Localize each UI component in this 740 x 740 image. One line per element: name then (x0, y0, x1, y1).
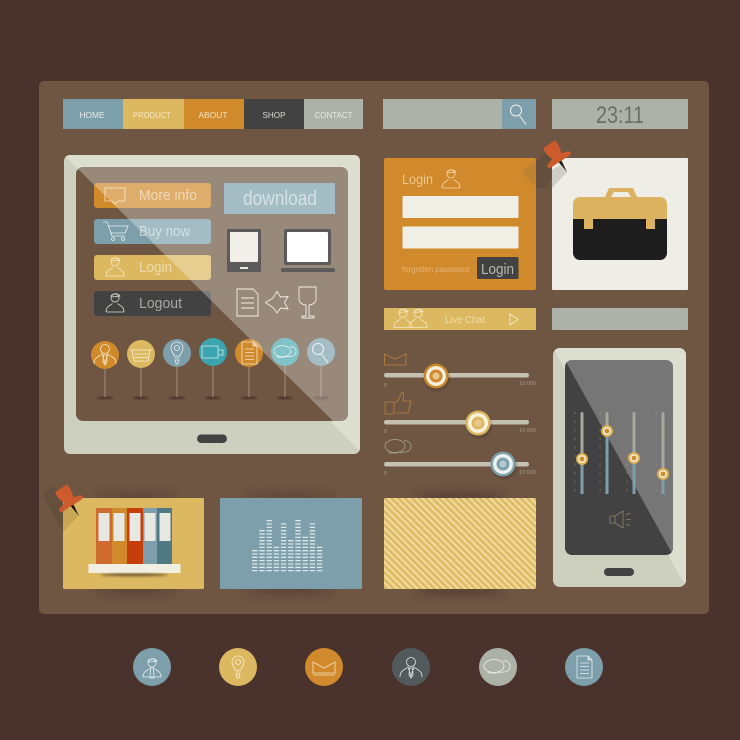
phone home button (604, 568, 634, 576)
icon: red push pin bottom (49, 481, 91, 524)
live chat bar (384, 308, 536, 330)
search bar (383, 99, 536, 129)
slider 2: 0 (384, 429, 387, 435)
panel: login card: Login (402, 171, 433, 187)
card shadows (96, 494, 505, 594)
icon: wine glass (299, 287, 316, 318)
slider 1: 10 000 (519, 381, 536, 387)
input: username (402, 196, 518, 218)
panel: equalizer card (220, 498, 362, 589)
slider 3 (384, 440, 536, 478)
slider 1: 0 (384, 383, 387, 389)
icon: laptop (281, 229, 335, 272)
clock (552, 99, 688, 129)
glass reflection (565, 360, 673, 555)
navigation bar: CONTACT (314, 110, 352, 120)
panel: login card: forgotten password (402, 264, 469, 274)
button: login (94, 255, 211, 280)
button: logout (94, 291, 211, 316)
icon: tablet device (227, 229, 261, 272)
icon: star (266, 292, 288, 313)
navigation bar: PRODUCT (133, 110, 171, 120)
slider 3: 0 (384, 471, 387, 477)
button: login submit: Login (481, 262, 514, 278)
shelf (88, 564, 180, 573)
shadow: pin on panel bottom (43, 485, 63, 532)
slider 1 (384, 354, 536, 390)
glass reflection (76, 167, 348, 436)
shadow: pin on panel top (533, 150, 560, 188)
binders (96, 508, 172, 564)
button: more info (94, 183, 211, 208)
button: buy now (94, 219, 211, 244)
icon: red push pin top (537, 137, 579, 180)
button: login: Login (139, 260, 172, 276)
tablet home button (197, 434, 227, 443)
button: download (224, 183, 335, 214)
icon: document (237, 289, 258, 316)
icon: envelope (305, 648, 343, 686)
button: logout: Logout (139, 296, 182, 312)
icon: user (442, 170, 460, 188)
panel: striped card (384, 498, 536, 589)
pin markers (91, 338, 335, 399)
clock: 23:11 (596, 102, 644, 129)
panel: login card (384, 158, 536, 290)
icon: document (565, 648, 603, 686)
button: more info: More info (139, 188, 197, 204)
navigation bar: HOME (80, 110, 105, 120)
gray bar (552, 308, 688, 330)
panel: main board (39, 81, 709, 614)
icon: businessman (392, 648, 430, 686)
navigation bar (63, 99, 363, 129)
navigation bar: ABOUT (198, 110, 228, 120)
panel: tablet (64, 155, 360, 454)
live chat bar: Live Chat (445, 315, 485, 326)
panel: binders card (63, 498, 204, 589)
icon: light bulb (219, 648, 257, 686)
button: login submit (477, 257, 518, 279)
button: download: download (243, 188, 317, 210)
slider 2 (384, 392, 536, 438)
icon: man with tie (133, 648, 171, 686)
panel: briefcase card (552, 158, 688, 290)
slider 2: 10 000 (519, 428, 536, 434)
panel: phone (553, 348, 686, 587)
mixer sliders (575, 412, 669, 494)
icon: briefcase (573, 188, 667, 260)
slider 3: 10 000 (519, 470, 536, 476)
input: password (402, 226, 518, 248)
icon: magnifier (510, 105, 526, 124)
bottom icon row (133, 648, 603, 686)
icon: chat bubbles (479, 648, 517, 686)
icon: speaker (610, 511, 631, 528)
sliders (384, 354, 536, 478)
chart: equalizer (255, 519, 320, 571)
button: buy now: Buy now (139, 224, 190, 240)
navigation bar: SHOP (262, 110, 286, 120)
